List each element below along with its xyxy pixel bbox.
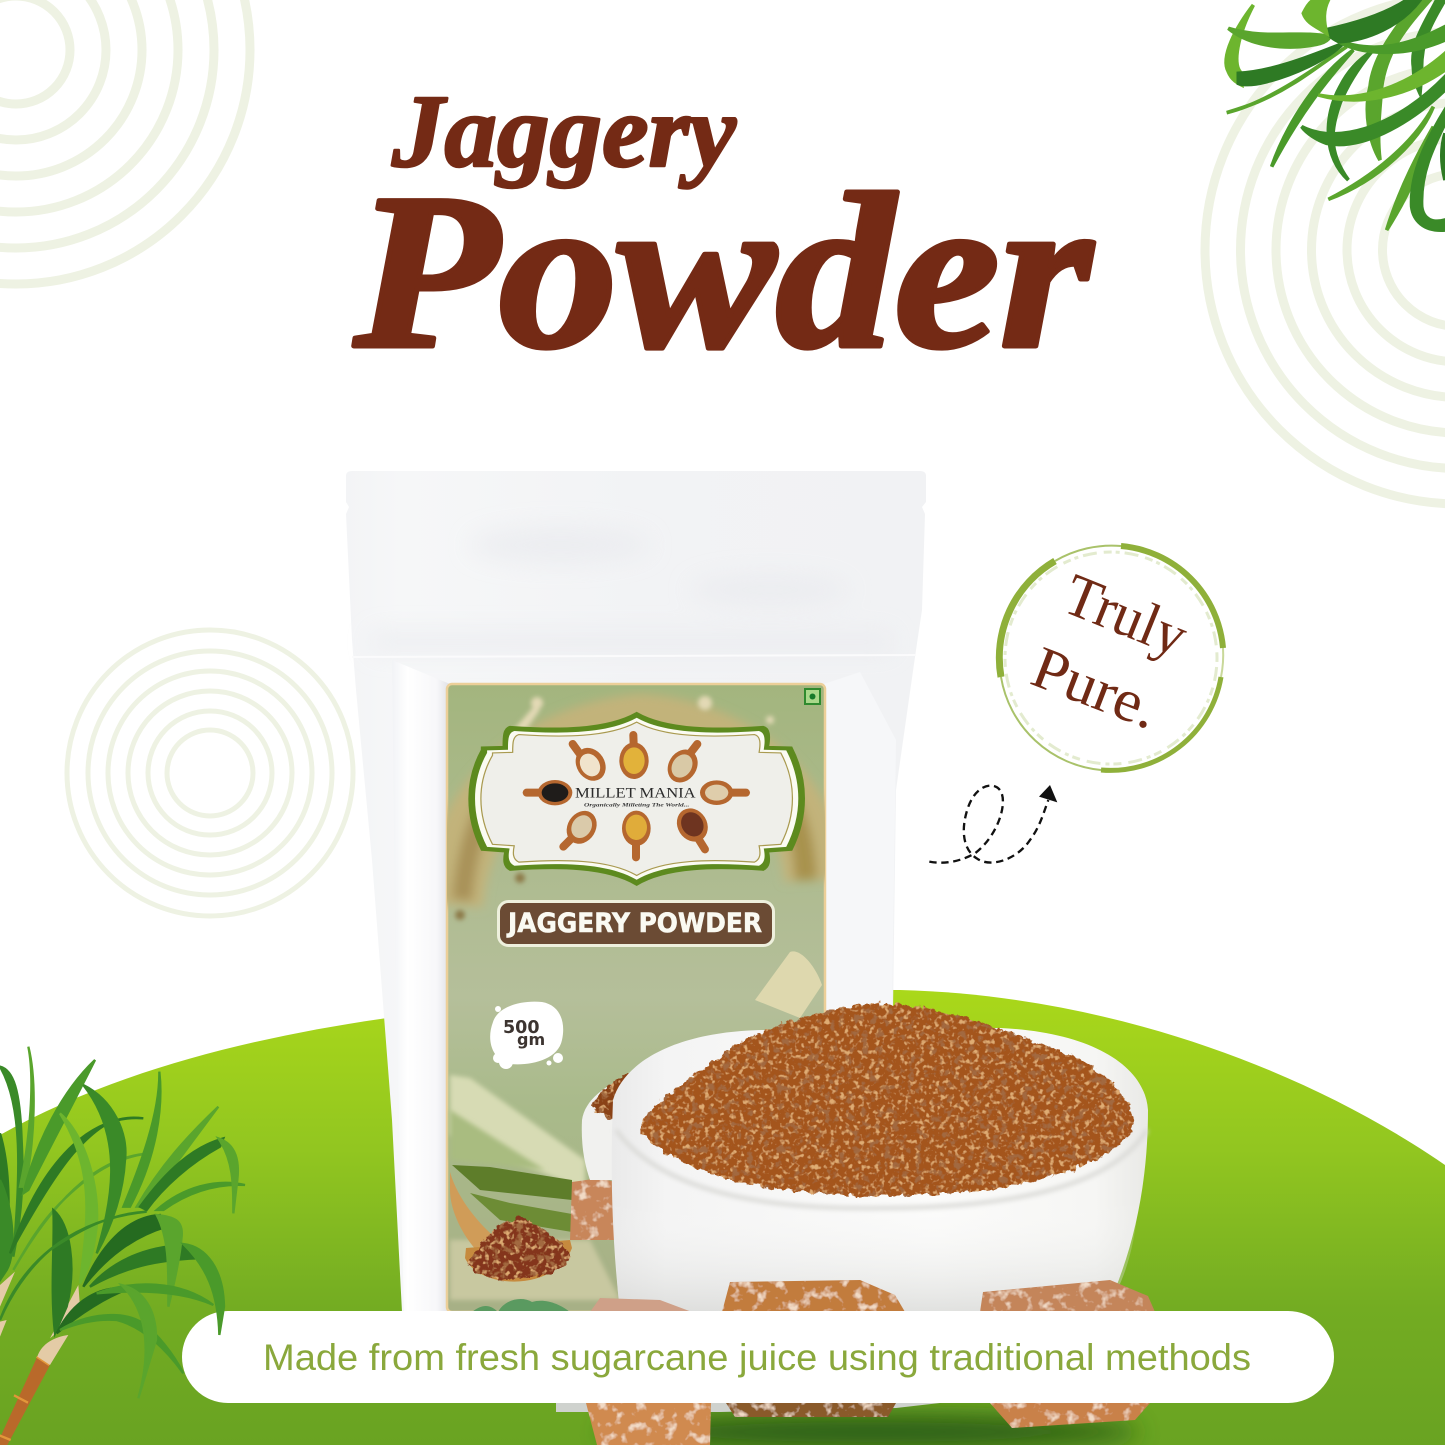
pouch soft shading xyxy=(372,527,892,652)
bowl lip shadow xyxy=(616,1130,1147,1208)
label blurred juice splash xyxy=(452,696,815,920)
logo tagline: Organically Milleting The World... xyxy=(584,802,689,808)
stalk pale sheath xyxy=(0,1272,80,1365)
shadow under bowl xyxy=(600,1414,1140,1445)
title xyxy=(353,74,1095,395)
pouch body xyxy=(346,471,926,1312)
main bowl xyxy=(612,1003,1148,1312)
cane piece top right xyxy=(755,951,822,1018)
pouch side fold xyxy=(392,660,450,1312)
chunk: below pill, right xyxy=(990,1403,1150,1428)
chunk: below pill, centre xyxy=(726,1403,896,1417)
label wooden spoon of powder xyxy=(450,1172,572,1282)
title line: Jaggery: Jaggery xyxy=(391,74,737,189)
dashed arrow xyxy=(929,785,1057,863)
product pouch xyxy=(346,471,926,1312)
badge text: Truly: Truly xyxy=(1055,561,1197,669)
logo wordmark: MILLET MANIA xyxy=(575,785,696,801)
product label xyxy=(447,684,825,1312)
decorative rings: top left xyxy=(0,0,250,284)
title line: Powder: Powder xyxy=(353,149,1095,395)
badge brush ring xyxy=(999,546,1223,770)
green hill background xyxy=(0,990,1445,1445)
plaque outer frame xyxy=(469,713,804,885)
plaque cream face xyxy=(475,718,798,880)
chunk: below pill, left xyxy=(586,1403,711,1445)
sugarcane plant: top right xyxy=(1226,0,1445,230)
badge blob xyxy=(490,1002,563,1064)
plaque inner gold line xyxy=(481,722,792,875)
chunk: behind pill, right xyxy=(980,1280,1155,1312)
decorative rings: top right xyxy=(1205,0,1445,504)
stalk nodes xyxy=(0,1357,49,1440)
jaggery chunks xyxy=(586,1280,1155,1445)
badge text: Pure: Pure. xyxy=(1023,634,1168,742)
chunk: behind pill, left xyxy=(590,1298,692,1312)
organic mark xyxy=(805,689,820,704)
label jaggery cube xyxy=(570,1178,615,1240)
decorative rings: middle left xyxy=(67,630,353,916)
spoons xyxy=(527,735,746,857)
sugarcane plant: bottom left xyxy=(0,1047,245,1445)
badge bubbles xyxy=(493,1006,563,1069)
badge text: 500 xyxy=(503,1018,540,1038)
bowl lower shading xyxy=(615,1190,1140,1312)
pouch seal line xyxy=(352,655,916,657)
stalk xyxy=(0,1357,50,1445)
jaggery powder mound xyxy=(640,1003,1135,1196)
product name badge: JAGGERY POWDER xyxy=(506,908,762,939)
pouch right fold xyxy=(824,672,896,1010)
caption pill xyxy=(182,1311,1334,1403)
weight badge xyxy=(490,1002,563,1069)
bowl base strip xyxy=(556,1403,940,1412)
logo plaque xyxy=(469,713,804,885)
back bowl xyxy=(582,1068,650,1180)
weight badge: gm xyxy=(517,1030,545,1049)
caption text: Made from fresh sugarcane juice using traditional methods xyxy=(263,1337,1251,1378)
leaves xyxy=(0,1047,245,1398)
label leaf sprig xyxy=(472,1299,570,1312)
label sugarcane pieces xyxy=(450,951,822,1300)
badge: Truly Pure xyxy=(999,546,1223,770)
product name badge xyxy=(498,902,774,946)
chunk: behind pill, centre xyxy=(722,1280,905,1312)
bowl body xyxy=(612,1028,1148,1312)
label background xyxy=(447,684,825,1312)
